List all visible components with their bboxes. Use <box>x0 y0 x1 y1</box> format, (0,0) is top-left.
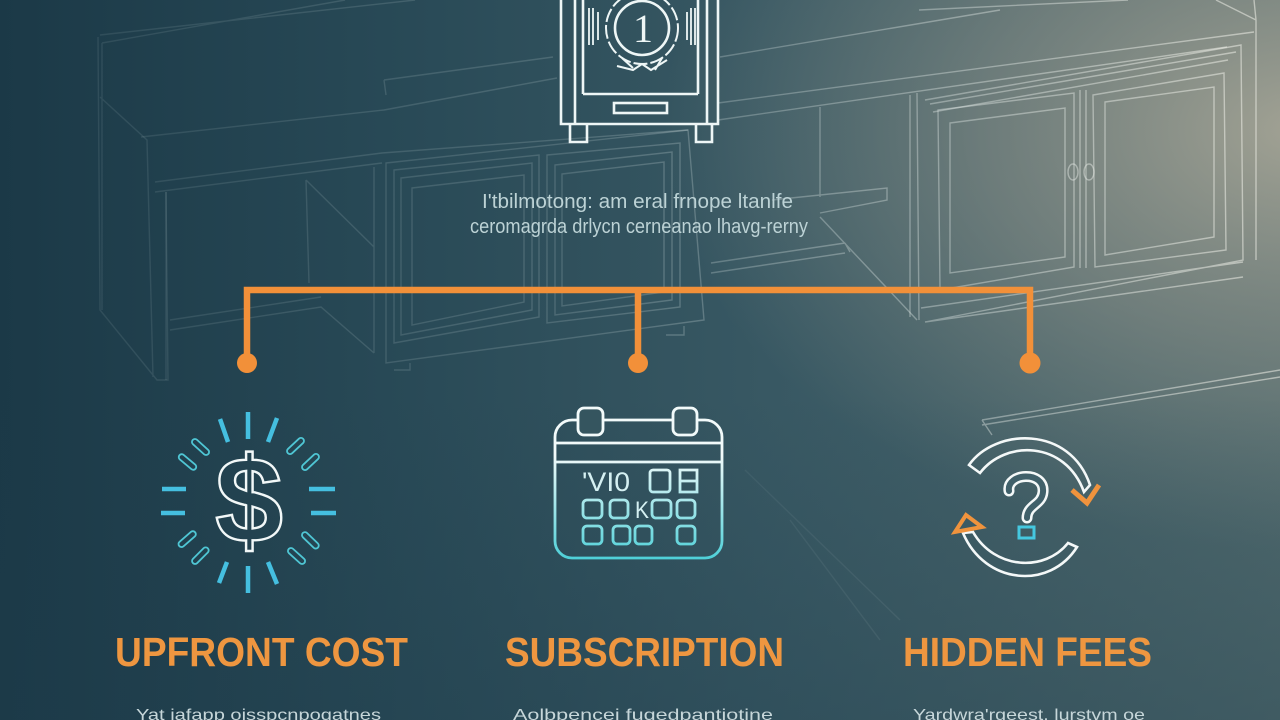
icon: calendar <box>555 408 722 558</box>
orange connector tree <box>237 290 1040 374</box>
calendar glyphs <box>582 467 649 524</box>
intro text block: I'tbilmotong: am eral frnope ltanlfe <box>482 191 793 213</box>
calendar glyphs: 'VI0 <box>582 467 630 497</box>
badge number: 1 <box>633 6 653 51</box>
calendar glyphs: K <box>635 497 649 524</box>
top icon: cabinet with number one badge <box>561 0 718 142</box>
intro text block: ceromagrda drlycn cerneanao lhavg-rerny <box>470 216 808 238</box>
heading: subscription: SUBSCRIPTION <box>505 629 784 675</box>
icon: question mark with cycle arrows <box>955 438 1099 576</box>
heading: hidden fees: HIDDEN FEES <box>903 629 1152 675</box>
icon: dollar sign with rays: $ <box>215 432 283 568</box>
intro text block <box>470 191 808 238</box>
heading: upfront cost: UPFRONT COST <box>115 629 408 675</box>
icon: dollar sign with rays <box>161 412 336 593</box>
